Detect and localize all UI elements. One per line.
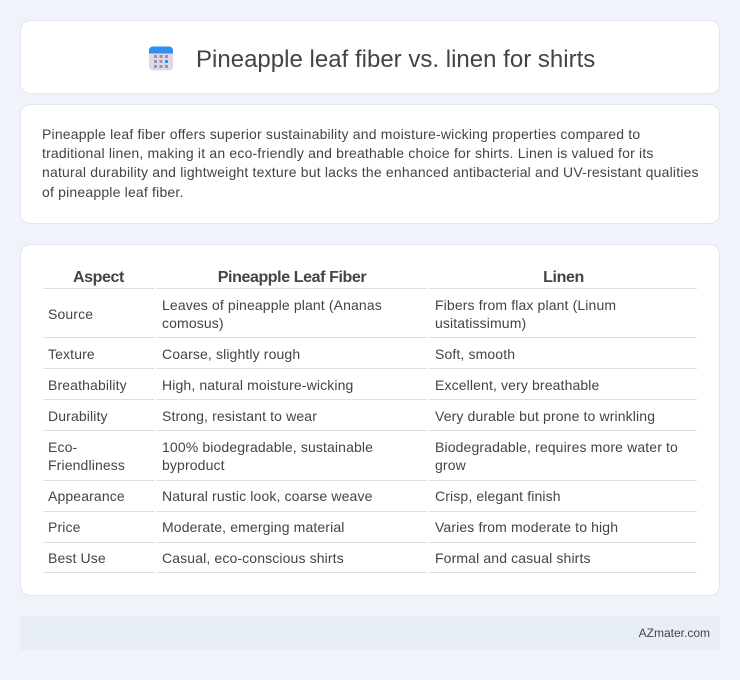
icon: calendar <box>149 46 173 70</box>
row: Price: Price <box>48 519 81 535</box>
panel: comparison table <box>20 244 720 596</box>
row: Eco-Friendliness <box>48 439 125 473</box>
column header: Linen: Linen <box>543 269 584 286</box>
row: Texture: Texture <box>48 346 95 362</box>
footer text: AZmater.com <box>639 626 710 640</box>
comparison table: Soft, smooth <box>435 346 515 362</box>
comparison table: usitatissimum) <box>435 315 526 331</box>
comparison table: Biodegradable, requires more water to <box>435 439 678 455</box>
comparison table: 100% biodegradable, sustainable <box>162 439 373 455</box>
panel: title card <box>20 20 720 94</box>
comparison table: Fibers from flax plant (Linum <box>435 297 616 313</box>
row: Eco-Friendliness: Eco- <box>48 439 77 455</box>
row: Best Use: Best Use <box>48 550 106 566</box>
column header: Pineapple Leaf Fiber: Pineapple Leaf Fiber <box>218 269 366 286</box>
row: Eco-Friendliness: Friendliness <box>48 457 125 473</box>
summary text: traditional linen, making it an eco-friendly and breathable choice for shirts. Linen is valued for its <box>42 145 654 161</box>
row: Breathability: Breathability <box>48 377 127 393</box>
comparison table: comosus) <box>162 315 224 331</box>
summary text: of pineapple leaf fiber. <box>42 184 184 200</box>
comparison table: Leaves of pineapple plant (Ananas <box>162 297 382 313</box>
column header: Aspect: Aspect <box>73 269 124 286</box>
comparison table: Varies from moderate to high <box>435 519 618 535</box>
comparison table: Formal and casual shirts <box>435 550 591 566</box>
comparison table: byproduct <box>162 457 225 473</box>
title: Pineapple leaf fiber vs. linen for shirts <box>196 46 595 73</box>
comparison table: grow <box>435 457 466 473</box>
summary text <box>42 126 699 200</box>
row: Appearance: Appearance <box>48 488 125 504</box>
comparison table: Moderate, emerging material <box>162 519 344 535</box>
summary text: Pineapple leaf fiber offers superior sustainability and moisture-wicking properties compared to <box>42 126 640 142</box>
comparison table: Coarse, slightly rough <box>162 346 300 362</box>
row: Source: Source <box>48 306 93 322</box>
row: Durability: Durability <box>48 408 108 424</box>
summary text: natural durability and lightweight texture but lacks the enhanced antibacterial and UV-resistant qualities <box>42 164 699 180</box>
comparison table: Casual, eco-conscious shirts <box>162 550 344 566</box>
comparison table: Excellent, very breathable <box>435 377 599 393</box>
comparison table: Natural rustic look, coarse weave <box>162 488 372 504</box>
panel: summary <box>20 104 720 224</box>
comparison table: Crisp, elegant finish <box>435 488 561 504</box>
comparison table: Very durable but prone to wrinkling <box>435 408 655 424</box>
footer bar <box>20 616 720 650</box>
comparison table: Strong, resistant to wear <box>162 408 317 424</box>
comparison table: High, natural moisture-wicking <box>162 377 353 393</box>
